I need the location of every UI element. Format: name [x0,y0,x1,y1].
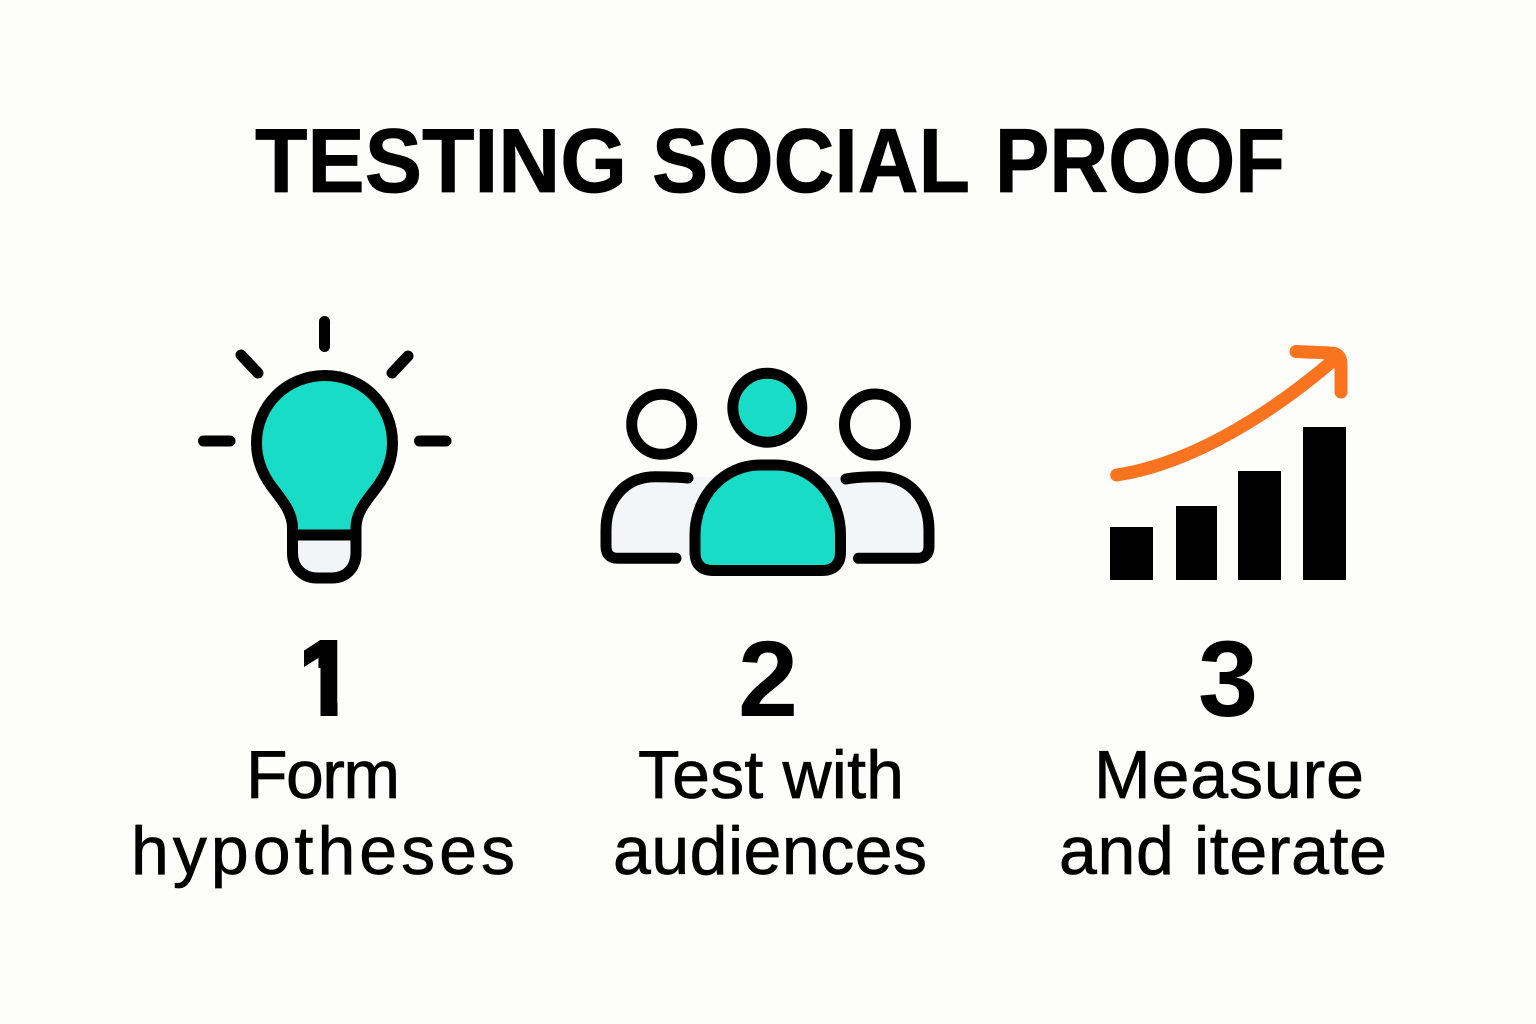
title: TESTING [255,111,627,212]
step 2 label: Test with [638,737,904,813]
step 2 number: 2 [738,618,798,739]
step 3 number: 3 [1198,618,1258,739]
step 3 label: Measure [1094,737,1364,813]
title: PROOF [995,111,1285,212]
step 3 label: and iterate [1059,813,1387,889]
step 1 number: 1 [295,618,355,739]
step 1 label: Form [246,737,400,813]
icon: audience group [606,373,929,570]
step 2 label: audiences [613,813,927,889]
step 1 label: hypotheses [131,813,515,889]
title: SOCIAL [652,111,970,212]
icon: light bulb [204,322,446,578]
icon: growth bar chart with arrow [1110,352,1346,580]
